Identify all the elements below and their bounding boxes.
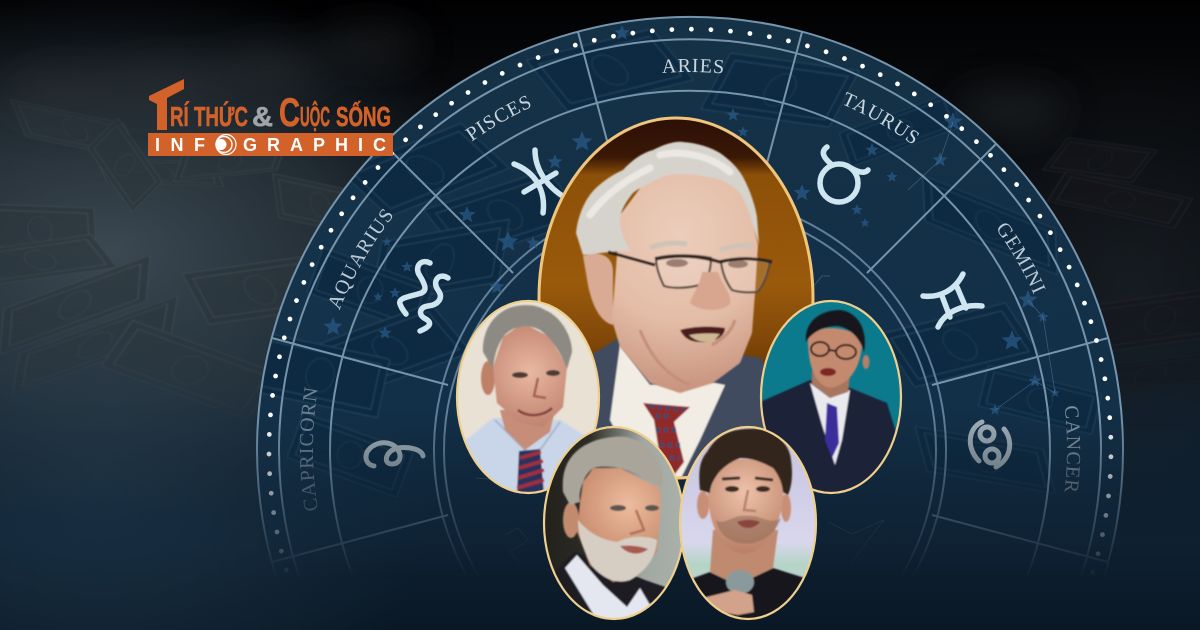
hair — [576, 142, 759, 255]
logo: Tri Thuc & Cuoc Song Infographic — [148, 79, 393, 156]
logo target icon — [216, 134, 236, 154]
constellation lines — [476, 122, 1055, 565]
eyes — [512, 372, 528, 378]
logo wordmark: RÍ THỨC — [170, 101, 248, 132]
logo wordmark: & — [252, 101, 273, 132]
portrait frame — [761, 301, 901, 493]
portrait: large centre man — [530, 110, 820, 490]
face — [612, 168, 758, 393]
hair — [483, 305, 572, 369]
icon: Cancer glyph — [970, 422, 1010, 467]
nose — [690, 272, 730, 310]
logo wordmark: UỘC — [300, 100, 330, 132]
wheel rings — [257, 17, 1123, 625]
wheel spokes — [272, 32, 1108, 562]
black t-shirt — [688, 568, 805, 625]
nose and smile — [534, 378, 546, 398]
brows — [650, 243, 753, 250]
icon: Pisces glyph — [514, 150, 566, 213]
ears — [697, 491, 709, 519]
portrait frame — [544, 427, 684, 619]
portrait background — [540, 120, 812, 365]
label: Gemini: GEMINI — [998, 223, 1046, 294]
neck — [500, 410, 555, 450]
nose — [744, 490, 756, 511]
collar shadow — [495, 420, 560, 475]
portrait frame — [539, 118, 813, 478]
portrait frame — [457, 301, 599, 493]
background: smoke band — [10, 27, 1065, 132]
icon: Capricorn glyph — [366, 443, 423, 466]
background: left money bills — [2, 106, 344, 336]
portrait: left man — [450, 295, 610, 500]
mouth — [737, 520, 760, 528]
shirt — [460, 418, 592, 500]
icon: Taurus glyph — [820, 147, 868, 202]
shirt — [810, 383, 850, 465]
hair — [563, 437, 663, 505]
portrait: bottom left man — [540, 420, 690, 625]
mouth — [680, 327, 725, 342]
label: Aries: ARIES — [662, 58, 723, 74]
icon: Aquarius glyph — [400, 262, 448, 331]
ear — [583, 254, 613, 325]
eyes — [666, 259, 688, 267]
face — [577, 468, 661, 582]
label: Taurus: TAURUS — [844, 92, 920, 144]
tie — [517, 449, 544, 493]
logo wordmark: C — [279, 91, 300, 135]
hair — [699, 429, 792, 495]
portrait: right man — [755, 295, 905, 500]
ear — [563, 502, 579, 538]
jacket — [548, 552, 672, 625]
logo wordmark: SỐNG — [336, 100, 391, 132]
portrait frame — [680, 427, 816, 619]
neck — [710, 530, 778, 585]
cheek shadow — [640, 320, 735, 385]
portrait: bottom right man — [675, 420, 825, 625]
suit and shirt — [592, 338, 764, 476]
logo T mark — [149, 79, 184, 130]
nose — [630, 510, 644, 534]
ear — [481, 361, 495, 395]
brows and eyes — [722, 478, 773, 480]
face — [493, 323, 567, 427]
zodiac labels — [300, 58, 1080, 511]
suit — [760, 380, 900, 500]
hand — [703, 590, 754, 615]
mouth — [820, 368, 836, 376]
zodiac wheel — [256, 16, 1124, 574]
label: Pisces: PISCES — [464, 96, 530, 142]
glasses — [656, 255, 770, 292]
glasses — [811, 342, 856, 359]
label: Aquarius: AQUARIUS — [330, 208, 392, 310]
wheel: money texture — [250, 29, 1102, 498]
stubble — [716, 516, 781, 544]
logo banner text: GRAPHIC — [243, 135, 386, 155]
eyes — [610, 505, 626, 511]
glasses frame top — [608, 252, 772, 265]
microphone — [726, 570, 754, 594]
neck — [812, 370, 850, 398]
ear — [862, 355, 870, 369]
wheel stars — [324, 25, 1060, 415]
face — [808, 328, 862, 388]
logo banner text: INF — [155, 135, 205, 155]
tie — [825, 403, 839, 458]
wheel dots — [269, 29, 1111, 625]
head — [576, 142, 772, 393]
background: right money bills — [1042, 138, 1193, 228]
wheel disc — [258, 18, 1122, 510]
hair shading — [590, 153, 730, 215]
icon: Gemini glyph — [923, 274, 982, 327]
hair — [806, 310, 865, 352]
logo banner text — [155, 135, 386, 155]
beard — [578, 520, 657, 581]
logo banner — [148, 133, 393, 156]
face — [708, 459, 784, 554]
label: Capricorn: CAPRICORN — [300, 386, 318, 511]
label: Cancer: CANCER — [1064, 406, 1080, 492]
mouth — [620, 546, 648, 554]
shirt — [565, 555, 650, 625]
logo wordmark — [170, 91, 391, 135]
